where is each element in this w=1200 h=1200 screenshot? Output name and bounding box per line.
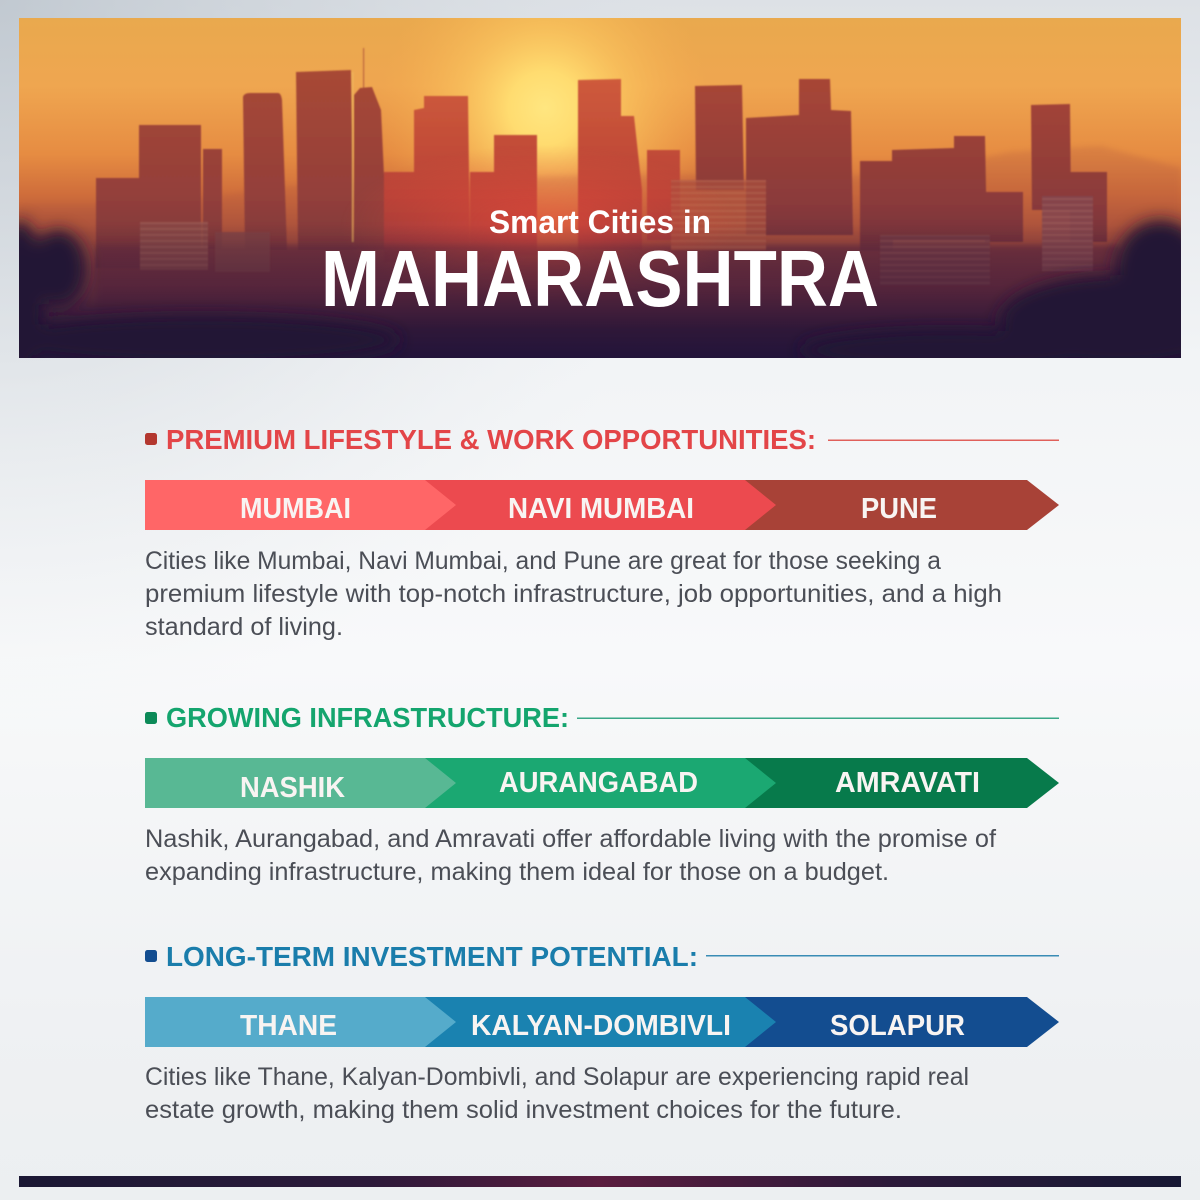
section 1 arrow bar [145,480,1059,530]
section 2 description: Nashik, Aurangabad, and Amravati offer affordable living with the promise of [145,825,996,853]
section 3: long-term investment [145,941,1059,1124]
section 1 arrow bar: PUNE [861,493,937,525]
section 1 heading: PREMIUM LIFESTYLE & WORK OPPORTUNITIES: [166,424,816,455]
lighter mid-rise buildings with windows [140,180,1093,285]
section 3 arrow bar: SOLAPUR [830,1010,965,1042]
section 1 description [145,547,1002,641]
section 2 heading [145,702,1059,733]
lower city mass [94,243,1120,296]
section 1: premium lifestyle [145,424,1059,641]
section 2 arrow bar: NASHIK [240,772,345,804]
tree silhouettes [19,208,1181,344]
ground shadow [19,225,1181,358]
footer band [19,1176,1181,1187]
banner: sunset city skyline [0,18,1200,380]
section 2 heading: GROWING INFRASTRUCTURE: [166,702,569,733]
section 3 description: Cities like Thane, Kalyan-Dombivli, and Solapur are experiencing rapid real [145,1063,969,1091]
section 3 arrow bar: KALYAN-DOMBIVLI [471,1010,731,1042]
section 1 description: Cities like Mumbai, Navi Mumbai, and Pune are great for those seeking a [145,547,941,575]
title: Smart Cities in [489,204,711,240]
distant haze hills [286,146,1180,212]
section 1 description: standard of living. [145,613,343,641]
section 2: growing infrastructure [145,702,1059,886]
section 2 description [145,825,996,886]
section 3 arrow bar [145,997,1059,1047]
section 3 heading [145,941,1059,972]
section 1 arrow bar: MUMBAI [240,493,351,525]
title [326,210,878,307]
section 1 description: premium lifestyle with top-notch infrastructure, job opportunities, and a high [145,580,1002,608]
title: MAHARASHTRA [321,234,879,323]
section 3 heading: LONG-TERM INVESTMENT POTENTIAL: [166,941,698,972]
skyscraper silhouettes [96,48,1107,268]
section 3 arrow bar: THANE [240,1010,337,1042]
section 3 description: estate growth, making them solid investment choices for the future. [145,1096,902,1124]
section 1 arrow bar: NAVI MUMBAI [508,493,694,525]
section 2 arrow bar [145,758,1059,808]
section 2 arrow bar: AURANGABAD [499,767,698,799]
section 2 description: expanding infrastructure, making them ideal for those on a budget. [145,858,889,886]
section 2 arrow bar: AMRAVATI [835,767,980,799]
section 3 description [145,1063,969,1124]
